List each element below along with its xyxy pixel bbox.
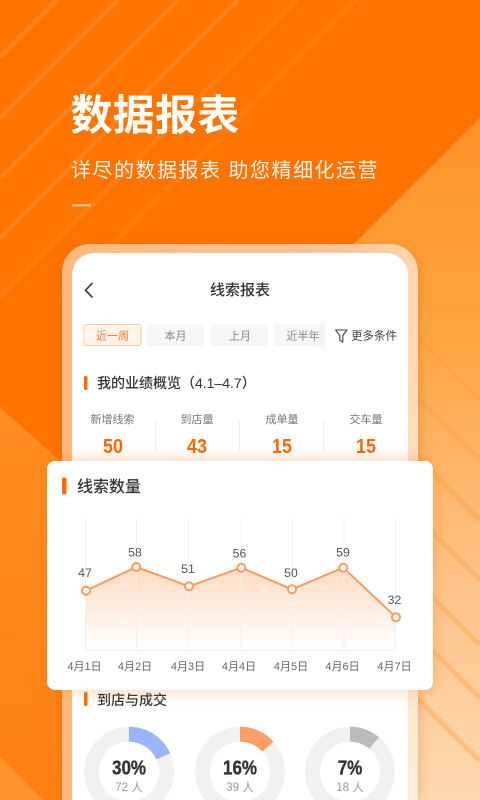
data values — [78, 546, 401, 607]
stats row: 15 — [356, 436, 376, 458]
donut: 30% — [84, 727, 174, 800]
screen title: 线索报表 — [210, 282, 270, 299]
data values: 47 — [78, 566, 92, 580]
stats row: 43 — [187, 436, 207, 458]
short divider — [72, 204, 91, 206]
donut: 30%: 30% — [112, 756, 146, 779]
stats row: 15 — [272, 436, 292, 458]
data values: 32 — [388, 593, 401, 607]
date axis: 4月2日 — [118, 661, 152, 673]
stats row: 交车量 — [350, 412, 382, 426]
donut: 7%: 7% — [338, 756, 362, 779]
filter tabs: 近半年 — [286, 328, 320, 342]
section heading: performance overview: 我的业绩概览（4.1–4.7） — [97, 375, 256, 391]
date axis: 4月1日 — [67, 661, 102, 673]
panel: lead count — [47, 461, 433, 690]
phone mockup — [60, 244, 420, 800]
data values: 51 — [181, 562, 195, 576]
donut: 16% — [195, 727, 285, 800]
more filters label: 更多条件 — [351, 328, 397, 342]
stats row: 50 — [103, 436, 123, 458]
section heading: visits and deals: 到店与成交 — [97, 692, 167, 708]
date axis: 4月4日 — [222, 661, 256, 673]
phone frame — [62, 244, 418, 800]
stats row: 新增线索 — [90, 412, 134, 426]
subtitle: 详尽的数据报表 助您精细化运营 — [71, 159, 379, 182]
stats row: 到店量 — [180, 412, 214, 426]
donut: 7% — [305, 727, 395, 800]
filter tabs: 本月 — [164, 328, 186, 342]
icon: back arrow — [86, 283, 92, 298]
icon: filter — [336, 330, 347, 342]
filter tabs — [84, 320, 328, 350]
data values: 58 — [128, 546, 142, 560]
filter tabs: 上月 — [229, 330, 251, 342]
stats row — [90, 412, 382, 458]
panel heading: 线索数量 — [77, 478, 141, 496]
donut: 16%: 16% — [223, 756, 257, 779]
date axis: 4月7日 — [377, 661, 412, 673]
title: 数据报表 — [70, 92, 240, 139]
date axis: 4月5日 — [274, 661, 308, 673]
donut: 7%: 18 人 — [336, 781, 364, 794]
data values: 56 — [233, 546, 246, 560]
phone screen — [72, 253, 408, 800]
filter tabs: 近一周 — [96, 330, 129, 342]
line chart — [67, 518, 412, 673]
data values: 59 — [336, 546, 350, 560]
date axis: 4月6日 — [325, 661, 360, 673]
donut: 16%: 39 人 — [226, 781, 254, 794]
date axis: 4月3日 — [171, 661, 205, 673]
data values: 50 — [284, 566, 298, 580]
date axis — [67, 661, 412, 673]
stats row: 成单量 — [266, 413, 298, 426]
donut: 30%: 72 人 — [115, 781, 143, 794]
